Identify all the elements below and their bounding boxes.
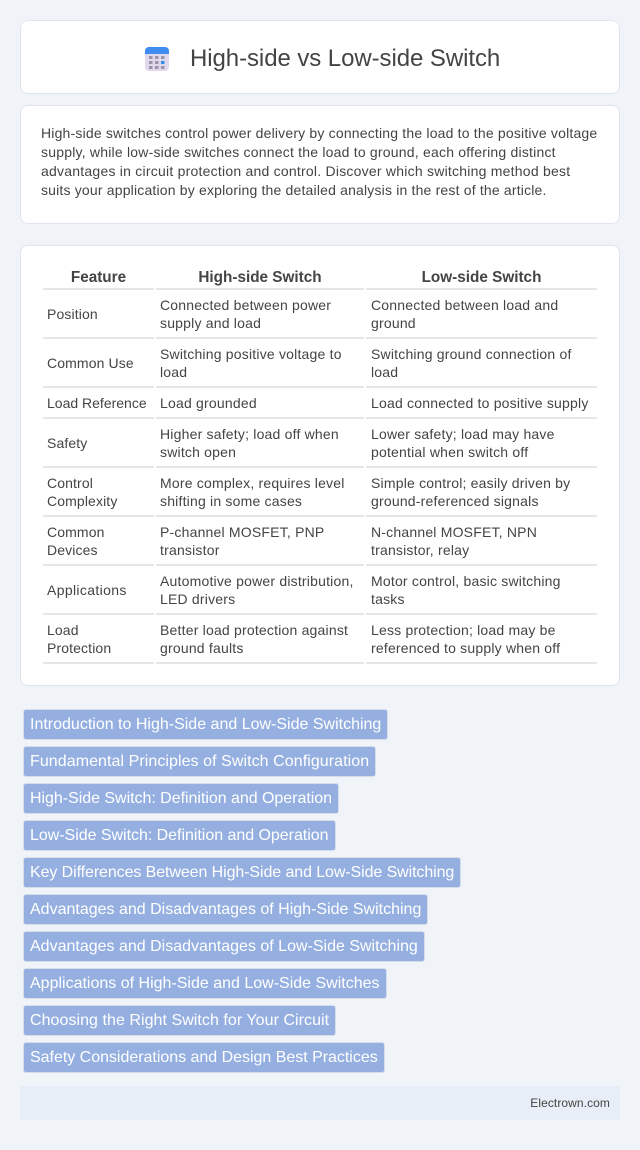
comparison table: Switching positive voltage to	[160, 346, 342, 362]
comparison table: LED drivers	[160, 591, 235, 607]
topic button: Advantages and Disadvantages of High-Side Switching	[30, 901, 421, 918]
footer credit: Electrown.com	[530, 1096, 610, 1110]
comparison table: P-channel MOSFET, PNP	[160, 524, 324, 540]
header: Feature: Feature	[71, 269, 126, 286]
comparison table: potential when switch off	[371, 444, 528, 460]
topic button	[23, 968, 387, 999]
comparison table: Control	[47, 475, 93, 491]
icon: calendar	[145, 47, 169, 71]
intro panel	[20, 105, 620, 224]
topic button	[23, 820, 336, 851]
header: Low-side Switch: Low-side Switch	[422, 269, 541, 286]
comparison table: load	[371, 364, 398, 380]
topic button: High-Side Switch: Definition and Operation	[30, 790, 332, 807]
footer	[20, 1086, 620, 1120]
comparison table: Complexity	[47, 493, 117, 509]
comparison table: switch open	[160, 444, 236, 460]
comparison table: N-channel MOSFET, NPN	[371, 524, 537, 540]
intro text: suits your application by exploring the detailed analysis in the rest of the article.	[41, 182, 547, 198]
comparison table: referenced to supply when off	[371, 640, 560, 656]
comparison table: Load connected to positive supply	[371, 395, 589, 411]
topic button	[23, 746, 376, 777]
comparison table: Common	[47, 524, 105, 540]
comparison table	[43, 269, 597, 664]
comparison table: shifting in some cases	[160, 493, 302, 509]
comparison table: Position	[47, 306, 98, 322]
topic button: Advantages and Disadvantages of Low-Side Switching	[30, 938, 418, 955]
topic button: Safety Considerations and Design Best Practices	[30, 1049, 378, 1066]
topic button	[23, 709, 388, 740]
intro text: advantages in circuit protection and control. Discover which switching method best	[41, 163, 570, 179]
intro text: High-side switches control power delivery by connecting the load to the positive voltage	[41, 125, 597, 141]
comparison table: Better load protection against	[160, 622, 348, 638]
comparison table: supply and load	[160, 315, 261, 331]
comparison table: ground faults	[160, 640, 244, 656]
comparison table: tasks	[371, 591, 405, 607]
comparison table: Devices	[47, 542, 98, 558]
comparison table: Connected between load and	[371, 297, 558, 313]
topic button: Choosing the Right Switch for Your Circuit	[30, 1012, 329, 1029]
comparison table: Load grounded	[160, 395, 257, 411]
topic list	[23, 709, 461, 1073]
topic button: Introduction to High-Side and Low-Side Switching	[30, 716, 381, 733]
comparison table: Lower safety; load may have	[371, 426, 555, 442]
comparison table: ground	[371, 315, 416, 331]
title: High-side vs Low-side Switch	[190, 45, 500, 72]
comparison table: Load	[47, 622, 79, 638]
topic button	[23, 1042, 385, 1073]
topic button	[23, 783, 339, 814]
comparison table: Switching ground connection of	[371, 346, 572, 362]
topic button: Fundamental Principles of Switch Configuration	[30, 753, 369, 770]
comparison table: Applications	[47, 582, 127, 598]
comparison table: ground-referenced signals	[371, 493, 539, 509]
comparison table: transistor, relay	[371, 542, 469, 558]
comparison table: transistor	[160, 542, 220, 558]
intro text	[41, 125, 597, 198]
comparison table: Less protection; load may be	[371, 622, 556, 638]
comparison table: Automotive power distribution,	[160, 573, 354, 589]
comparison table: load	[160, 364, 187, 380]
topic button: Key Differences Between High-Side and Low-Side Switching	[30, 864, 454, 881]
topic button: Applications of High-Side and Low-Side Switches	[30, 975, 380, 992]
comparison table: Higher safety; load off when	[160, 426, 339, 442]
comparison table: Safety	[47, 435, 87, 451]
header: High-side Switch: High-side Switch	[198, 269, 322, 286]
comparison table panel	[20, 245, 620, 686]
comparison table: Common Use	[47, 355, 134, 371]
comparison table: Connected between power	[160, 297, 331, 313]
comparison table: Simple control; easily driven by	[371, 475, 570, 491]
comparison table: More complex, requires level	[160, 475, 345, 491]
topic button	[23, 1005, 336, 1036]
topic button	[23, 931, 425, 962]
comparison table: Protection	[47, 640, 111, 656]
comparison table: Load Reference	[47, 395, 147, 411]
title panel	[20, 20, 620, 94]
topic button	[23, 857, 461, 888]
topic button: Low-Side Switch: Definition and Operation	[30, 827, 328, 844]
comparison table: Motor control, basic switching	[371, 573, 561, 589]
intro text: supply, while low-side switches connect the load to ground, each offering distinct	[41, 144, 556, 160]
topic button	[23, 894, 428, 925]
